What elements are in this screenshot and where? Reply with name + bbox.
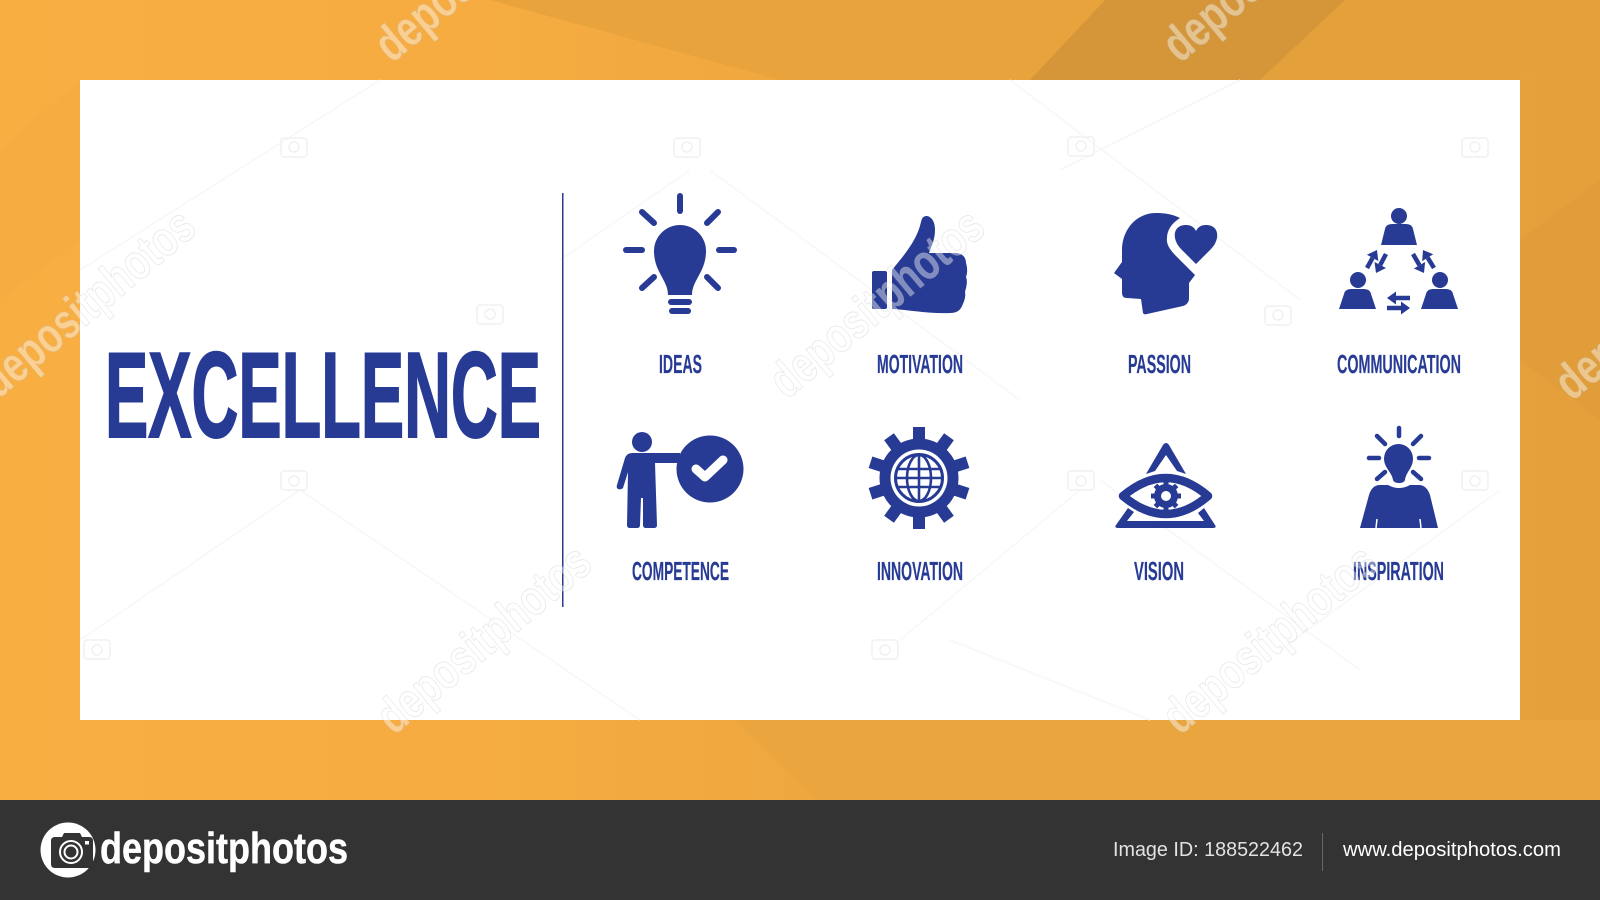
label: vision: VISION (1134, 556, 1184, 586)
watermark text overlays: depositphotos (365, 533, 602, 744)
icon: camera logo (40, 822, 96, 878)
label: competence: COMPETENCE (632, 556, 729, 586)
label: communication: COMMUNICATION (1337, 349, 1461, 379)
label: ideas: IDEAS (659, 349, 702, 379)
vertical divider (562, 193, 564, 607)
icon: head with heart (1114, 213, 1217, 314)
icon: person presenting check mark (617, 432, 744, 528)
icon: person with light bulb head (1360, 428, 1438, 528)
watermark text overlays: depositphotos (1151, 533, 1388, 744)
logo wordmark: depositphotos (100, 824, 348, 873)
label: inspiration: INSPIRATION (1353, 556, 1444, 586)
icon: light bulb (626, 196, 734, 314)
icon: eye in triangle with gear (1115, 443, 1216, 528)
icon: gear with globe (869, 427, 969, 529)
watermark text overlays: depositphotos (758, 197, 995, 408)
label: passion: PASSION (1128, 349, 1191, 379)
label: motivation: MOTIVATION (877, 349, 963, 379)
label: innovation: INNOVATION (877, 556, 963, 586)
title: EXCELLENCE (105, 327, 541, 463)
icon: three people communicating (1339, 208, 1458, 314)
footer bar (0, 800, 1600, 900)
image id text: Image ID: 188522462 (1113, 839, 1303, 861)
footer separator (1322, 833, 1323, 871)
white main panel (80, 80, 1520, 720)
icon: thumbs up (872, 216, 967, 313)
website text: www.depositphotos.com (1342, 839, 1561, 861)
